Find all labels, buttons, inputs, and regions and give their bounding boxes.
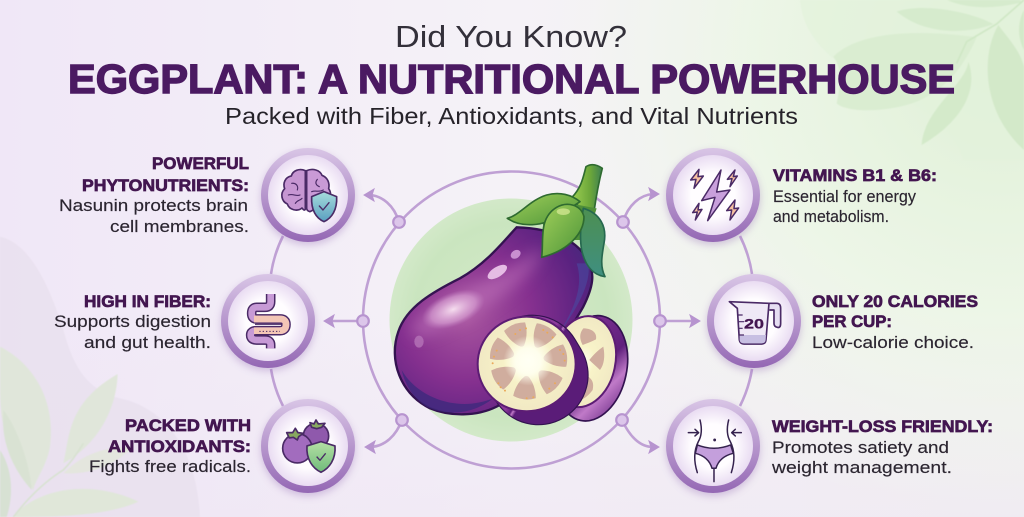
connector nodes [357,216,666,426]
arrow: to fiber [324,315,363,327]
calyx base [542,198,597,240]
label: only 20 calories per cup: Low-calorie choice. [812,334,974,352]
icon: lightning bolts [691,169,739,221]
right leaf [580,208,605,277]
left leaf [507,194,580,225]
centre leaf [542,204,584,257]
badge: berries [261,399,355,496]
central connector ring and arrows [271,172,752,468]
badge: waist [666,399,760,496]
eggplant illustration [395,165,637,428]
panel: packed with antioxidants [89,399,355,496]
label: high in fiber: Supports digestion [54,313,211,331]
background foliage: bottom left leaves [0,237,200,517]
icon: waist with arrows [688,420,741,482]
label: high in fiber: and gut health. [84,334,211,352]
badge: gut [221,274,315,371]
label: only 20 calories per cup: PER CUP: [812,312,892,331]
label: weight-loss friendly: Promotes satiety and [772,439,949,457]
icon: brain with shield [282,169,337,222]
subtitle: Packed with Fiber, Antioxidants, and Vital Nutrients [225,103,798,129]
label: high in fiber [54,292,211,352]
panel: only 20 calories per cup [707,274,978,371]
icon: berries with shield [283,420,335,472]
arrow: to antioxidants [365,420,402,453]
main heading: EGGPLANT: A NUTRITIONAL POWERHOUSE [68,56,955,102]
badge: energy [666,148,760,245]
label: weight-loss friendly: WEIGHT-LOSS FRIENDLY: [772,417,993,436]
label: packed with antioxidants: PACKED WITH [125,416,251,435]
label: powerful phytonutrients: POWERFUL [152,154,249,173]
badge: measuring cup [707,274,801,371]
label: vitamins b1 and b6: VITAMINS B1 & B6: [773,166,937,185]
badge: brain [261,148,355,245]
label: packed with antioxidants: ANTIOXIDANTS: [108,437,251,456]
label: vitamins b1 and b6: and metabolism. [773,208,889,226]
body sheen band [410,247,543,336]
label: powerful phytonutrients: cell membranes. [110,218,249,236]
label: weight-loss friendly: weight management. [771,459,952,477]
label: vitamins b1 and b6 [773,166,937,226]
panel: vitamins b1 and b6 [666,148,937,245]
label: powerful phytonutrients: Nasunin protects brain [59,197,248,215]
stem [572,165,602,212]
front slice [478,317,576,411]
label: only 20 calories per cup [812,292,978,352]
body highlights [416,281,490,337]
label: powerful phytonutrients [59,154,249,236]
arrow: to weight loss [622,420,659,453]
eggplant body [395,227,592,414]
icon: measuring cup with 20: 20 [744,316,764,332]
green backdrop circle [390,198,632,442]
panel: weight-loss friendly [666,399,993,496]
label: packed with antioxidants: Fights free radicals. [89,458,251,476]
panel: powerful phytonutrients [59,148,355,245]
label: weight-loss friendly [771,417,993,477]
icon: intestines [251,294,286,348]
label: packed with antioxidants [89,416,251,476]
label: vitamins b1 and b6: Essential for energy [773,188,917,206]
panel: high in fiber [54,274,315,371]
arrow: to phytonutrients [364,189,399,222]
body shading [402,370,493,413]
label: powerful phytonutrients: PHYTONUTRIENTS: [82,176,249,195]
background foliage: top right leaves [800,0,1024,160]
eyebrow: did you know: Did You Know? [395,19,627,54]
title block [68,19,955,129]
back slice [542,309,637,428]
arrow: to vitamins [623,188,659,222]
arrow: to calories [660,315,700,327]
label: only 20 calories per cup: ONLY 20 CALORIES [812,292,978,311]
label: high in fiber: HIGH IN FIBER: [84,292,211,311]
